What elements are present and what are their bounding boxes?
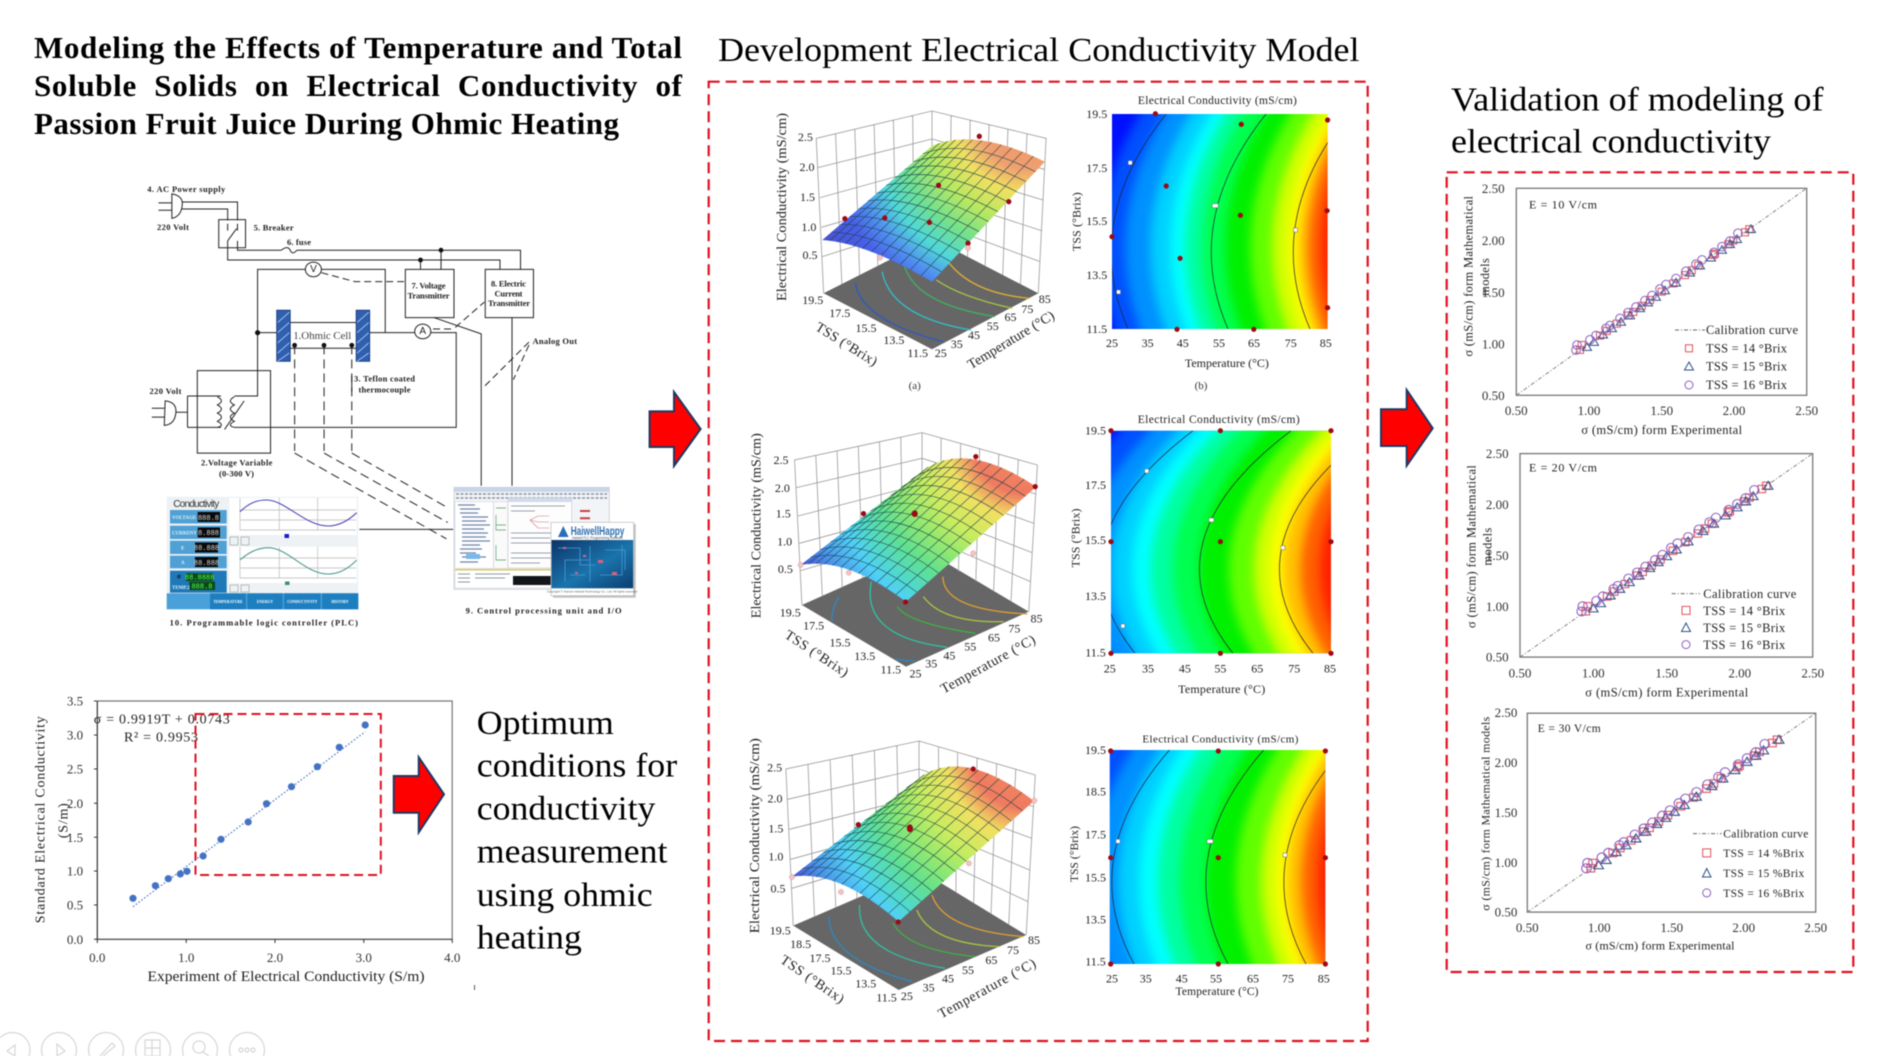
validation chart E = 10 V/cm: σ (mS/cm) form Mathematical [1461,195,1475,357]
3D surface plot (a): Temperature (°C) [965,308,1058,373]
calibration scatter chart: 1.0 [67,864,83,878]
3D surface plot: second row: 19.5 [780,605,801,619]
3D surface plot: third row: 18.5 [790,937,811,951]
text: optimum conditions: conductivity [477,790,655,827]
circuit diagram: ohmic heating system: 220 Volt [150,386,182,396]
PLC interface panel: ENERGY [257,600,273,604]
validation chart E = 20 V/cm: 1.00 [1486,599,1509,614]
validation chart E = 20 V/cm: 2.50 [1801,665,1824,680]
calibration scatter chart: 2.5 [67,762,83,776]
circuit diagram: ohmic heating system: V [310,264,317,275]
validation chart E = 30 V/cm: 1.50 [1495,805,1517,820]
validation chart E = 20 V/cm: 0.50 [1486,650,1509,665]
circuit diagram: ohmic heating system: 4. AC Power supply [147,184,226,194]
contour plot: third row: 17.5 [1085,827,1106,841]
validation chart E = 30 V/cm: 0.50 [1495,905,1517,920]
PLC interface panel: 8.888 [198,530,219,538]
heading: validation: Validation of modeling of [1451,82,1824,119]
contour plot: second row: 85 [1324,661,1336,675]
3D surface plot: second row: Electrical Conductivity (mS/cm) [750,433,765,618]
contour plot: second row: 35 [1142,661,1154,675]
contour plot: second row: 25 [1104,661,1116,675]
contour plot: third row: 55 [1210,971,1222,985]
arrow: to validation panel [1381,390,1433,466]
validation chart E = 30 V/cm: 1.00 [1495,855,1517,870]
PLC interface panel: CONDUCTIVITY [287,600,318,604]
contour plot: second row: 19.5 [1085,424,1106,438]
slide navigation buttons [0,1032,264,1056]
3D surface plot (a): 2.5 [798,130,813,144]
validation chart E = 20 V/cm: TSS = 16 °Brix [1703,638,1786,652]
3D surface plot: second row: 75 [1008,621,1020,635]
3D surface plot (a): Electrical Conductivity (mS/cm) [775,113,790,301]
contour plot (b): Electrical Conductivity (mS/cm) [1138,95,1297,107]
contour plot (b): 25 [1106,336,1118,350]
3D surface plot: third row: 11.5 [876,990,897,1004]
calibration scatter chart: 0.5 [67,898,83,912]
validation chart E = 20 V/cm: 2.00 [1486,497,1509,512]
validation chart E = 10 V/cm: 2.50 [1795,403,1818,418]
3D surface plot: third row: 85 [1028,933,1040,947]
circuit diagram: ohmic heating system: 3. Teflon coated [354,374,415,384]
3D surface plot: third row: Electrical Conductivity (mS/cm) [748,738,763,933]
validation chart E = 10 V/cm: 2.00 [1482,233,1505,248]
validation chart E = 10 V/cm: TSS = 15 °Brix [1706,360,1788,374]
3D surface plot: third row: 45 [942,971,954,985]
calibration scatter chart: 1.0 [178,950,194,965]
title: Passion Fruit Juice During Ohmic Heating [34,106,620,141]
validation chart E = 10 V/cm: 1.00 [1578,403,1600,418]
validation chart E = 20 V/cm: TSS = 15 °Brix [1703,621,1786,635]
3D surface plot (a): 1.0 [801,220,816,234]
text: optimum conditions [477,705,678,956]
contour plot: third row: 11.5 [1085,955,1106,969]
3D surface plot: third row: 0.5 [770,881,786,895]
validation chart E = 20 V/cm: TSS = 14 °Brix [1703,604,1786,618]
PLC interface panel: VOLTAGE [172,516,197,521]
contour plot: second row: 15.5 [1085,533,1106,547]
3D surface plot: third row: 2.5 [767,761,782,775]
contour plot: third row: 13.5 [1085,912,1106,926]
3D surface plot (a): 0.5 [802,248,818,262]
validation chart E = 20 V/cm: 1.50 [1655,665,1678,680]
validation chart E = 30 V/cm: σ (mS/cm) form Mathematical models [1479,716,1493,911]
heading: validation: electrical conductivity [1451,124,1771,160]
3D surface plot (a): 1.5 [800,190,815,204]
circuit diagram: ohmic heating system: thermocouple [358,385,411,395]
validation chart E = 10 V/cm: 0.50 [1505,403,1528,418]
3D surface plot (a): (a) [909,380,921,392]
3D surface plot (a): 25 [935,346,947,360]
PLC interface panel: 88.888 [194,560,219,568]
validation chart E = 10 V/cm: E = 10 V/cm [1529,197,1598,211]
contour plot: third row: TSS (°Brix) [1069,826,1081,882]
contour plot (b): 17.5 [1086,161,1107,175]
3D surface plot (a): 2.0 [800,160,814,174]
3D surface plot: second row [750,433,1042,697]
contour plot: second row: Temperature (°C) [1178,682,1265,696]
3D surface plot (a): 11.5 [907,346,928,360]
circuit diagram: ohmic heating system: 5. Breaker [254,223,294,233]
text: optimum conditions: measurement [477,834,668,871]
contour plot: third row: 65 [1247,971,1259,985]
circuit diagram: ohmic heating system: Current [494,288,523,298]
calibration scatter chart: Experiment of Electrical Conductivity (S/m) [148,969,424,985]
control processing software screenshot: Haiwell PLC Programming Software [572,536,623,540]
control processing software screenshot: Copyright © Xiamen Haiwell Technology Co., Ltd. All rights reserved [547,590,637,594]
contour plot: second row: 75 [1288,661,1300,675]
validation chart E = 10 V/cm: TSS = 16 °Brix [1706,378,1788,392]
circuit diagram: ohmic heating system: 220 Volt [157,222,189,232]
3D surface plot: second row: 25 [910,666,922,680]
contour plot (b): 45 [1177,336,1189,350]
3D surface plot: second row: 0.5 [778,562,793,576]
3D surface plot: second row: 85 [1030,611,1042,625]
panel: validation [1447,172,1853,972]
calibration scatter chart: 3.0 [67,728,83,742]
3D surface plot: second row: 1.5 [776,506,791,520]
contour plot: third row: 18.5 [1085,785,1106,799]
3D surface plot: third row: 1.0 [768,850,783,864]
calibration scatter chart: 4.0 [444,950,460,965]
validation chart E = 20 V/cm: E = 20 V/cm [1529,460,1598,474]
3D surface plot: second row: 13.5 [854,649,875,663]
validation chart E = 30 V/cm: TSS = 16 %Brix [1723,888,1805,900]
validation chart E = 20 V/cm: models [1480,527,1494,566]
text: optimum conditions: Optimum [477,705,614,742]
3D surface plot: second row: 2.0 [775,481,790,495]
calibration scatter chart: R² = 0.9953 [124,731,198,746]
calibration scatter chart: Standard Electrical Conductivity [34,716,48,923]
3D surface plot: third row: 75 [1007,943,1019,957]
circuit diagram: ohmic heating system: (0-300 V) [219,468,254,478]
PLC interface panel: E [181,546,185,552]
3D surface plot: third row: 35 [923,981,935,995]
contour plot (b): 15.5 [1086,214,1107,228]
calibration scatter chart: 1.5 [67,830,83,845]
contour plot (b): 55 [1213,336,1225,350]
contour plot (b): 65 [1248,336,1260,350]
calibration scatter chart [34,694,460,985]
PLC interface panel: HISTORY [331,600,349,604]
calibration scatter chart: 2.0 [67,796,83,811]
contour plot: second row: 55 [1214,661,1226,675]
validation chart E = 30 V/cm: 1.00 [1588,920,1611,935]
validation chart E = 10 V/cm: 2.00 [1723,403,1745,418]
3D surface plot: third row: 25 [901,989,913,1003]
contour plot (b): 35 [1142,336,1154,350]
contour plot: third row: 45 [1176,971,1188,985]
validation chart E = 10 V/cm: 2.50 [1482,181,1505,196]
PLC interface panel: TEMPERATURE [213,600,243,604]
contour plot: second row: 65 [1251,661,1263,675]
PLC interface panel [167,497,358,628]
validation chart E = 20 V/cm: σ (mS/cm) form Mathematical [1465,465,1479,628]
calibration scatter chart: 3.5 [67,694,83,708]
circuit diagram: ohmic heating system: Transmitter [408,290,450,300]
3D surface plot: second row: Temperature (°C) [938,633,1039,697]
validation chart E = 10 V/cm [1461,181,1818,437]
calibration scatter chart: σ = 0.9919T + 0.0743 [94,712,230,727]
3D surface plot: third row: 15.5 [830,964,852,978]
3D surface plot: second row: 55 [964,640,976,654]
3D surface plot (a) [775,111,1058,392]
title: Soluble Solids on Electrical Conductivity of [34,68,683,103]
contour plot: third row: Temperature (°C) [1176,986,1259,998]
3D surface plot: third row: 1.5 [768,821,783,835]
circuit diagram: ohmic heating system: A [419,326,426,337]
contour plot: second row: Electrical Conductivity (mS/cm) [1138,414,1300,426]
validation chart E = 30 V/cm: σ (mS/cm) form Experimental [1586,939,1735,953]
validation chart E = 30 V/cm [1479,705,1827,953]
panel: development model [706,80,1370,1043]
PLC interface panel: 88.888 [194,545,219,553]
validation chart E = 20 V/cm: 1.50 [1486,548,1509,563]
validation chart E = 30 V/cm: E = 30 V/cm [1538,723,1601,735]
3D surface plot (a): 35 [951,337,963,351]
contour plot (b): 13.5 [1086,268,1107,282]
validation chart E = 20 V/cm: 2.00 [1728,665,1751,680]
validation chart E = 30 V/cm: 0.50 [1516,920,1539,935]
calibration scatter chart: 0.0 [67,932,83,947]
contour plot: third row: Electrical Conductivity (mS/cm) [1142,733,1299,745]
contour plot: third row: 35 [1140,971,1152,985]
contour plot: third row: 19.5 [1085,743,1106,757]
3D surface plot: second row: 15.5 [830,636,850,650]
contour plot: second row: 17.5 [1085,478,1106,492]
contour plot: second row: 11.5 [1085,645,1106,659]
contour plot: second row: 13.5 [1085,589,1106,603]
validation chart E = 30 V/cm: TSS = 15 %Brix [1723,868,1805,880]
3D surface plot: second row: 11.5 [881,662,901,676]
validation chart E = 30 V/cm: 2.00 [1495,755,1517,770]
3D surface plot (a): 75 [1021,302,1033,316]
3D surface plot: third row: 2.0 [768,791,782,805]
contour plot (b) [1072,95,1332,392]
3D surface plot (a): 17.5 [829,306,850,320]
PLC interface panel: 888.8 [198,515,219,523]
3D surface plot: third row [748,738,1040,1022]
circuit diagram: ohmic heating system: 6. fuse [287,237,311,247]
validation chart E = 20 V/cm: 1.00 [1582,665,1605,680]
validation chart E = 30 V/cm: Calibration curve [1723,828,1808,840]
3D surface plot: second row: 17.5 [803,619,824,633]
3D surface plot: second row: 2.5 [774,453,788,467]
circuit diagram: ohmic heating system [147,184,577,539]
PLC interface panel: 88.8888 [185,574,214,582]
contour plot (b): 75 [1285,336,1297,350]
validation chart E = 10 V/cm: 0.50 [1482,388,1505,403]
3D surface plot: third row: Temperature (°C) [936,956,1039,1022]
3D surface plot: third row: 17.5 [810,951,830,965]
3D surface plot (a): 15.5 [856,321,876,335]
3D surface plot (a): 85 [1039,292,1051,306]
contour plot: third row: 85 [1318,971,1330,985]
PLC interface panel: CURRENT [172,532,197,536]
validation chart E = 10 V/cm: TSS = 14 °Brix [1706,342,1788,356]
heading: validation [1451,82,1824,160]
contour plot (b): 11.5 [1087,322,1107,336]
circuit diagram: ohmic heating system: Transmitter [488,298,530,308]
PLC interface panel: σ [177,572,181,580]
title [34,30,683,141]
validation chart E = 10 V/cm: σ (mS/cm) form Experimental [1581,423,1743,437]
control processing software screenshot [454,487,637,616]
validation chart E = 10 V/cm: 1.50 [1650,403,1673,418]
validation chart E = 30 V/cm: TSS = 14 %Brix [1723,848,1805,860]
PLC interface panel: 10. Programmable logic controller (PLC) [170,618,358,628]
validation chart E = 20 V/cm: 2.50 [1486,446,1509,461]
contour plot: second row [1070,414,1336,696]
calibration scatter chart: 3.0 [356,950,372,965]
calibration scatter chart: 2.0 [267,950,283,965]
validation chart E = 20 V/cm: Calibration curve [1703,587,1797,601]
control processing software screenshot: HaiwellHappy [571,526,625,538]
control processing software screenshot: 9. Control processing unit and I/O [466,606,622,616]
validation chart E = 30 V/cm: 2.50 [1804,920,1827,935]
3D surface plot: second row: TSS (°Brix) [782,628,851,681]
contour plot (b): 85 [1320,336,1332,350]
validation chart E = 20 V/cm: σ (mS/cm) form Experimental [1585,686,1749,700]
text: optimum conditions: conditions for [477,748,678,785]
contour plot: third row: 75 [1282,971,1294,985]
PLC interface panel: 888.8 [191,584,213,592]
arrow: to development panel [650,392,701,466]
3D surface plot (a): 19.5 [802,293,823,307]
3D surface plot: second row: 65 [988,631,1000,645]
PLC interface panel: TEMP.2 [172,586,190,591]
text: optimum conditions: using ohmic [477,877,653,914]
3D surface plot: third row: 65 [985,953,997,967]
contour plot (b): (b) [1195,380,1208,392]
validation chart E = 10 V/cm: 1.00 [1482,336,1505,352]
contour plot (b): 19.5 [1086,107,1107,121]
3D surface plot: third row: 19.5 [770,924,791,938]
circuit diagram: ohmic heating system: 8. Electric [491,278,526,288]
circuit diagram: ohmic heating system: 7. Voltage [412,281,446,291]
calibration scatter chart: 0.0 [89,950,105,965]
PLC interface panel: Conductivity [173,499,219,510]
3D surface plot (a): TSS (°Brix) [812,320,880,370]
PLC interface panel: A [181,561,185,566]
validation chart E = 20 V/cm [1465,446,1824,700]
validation chart E = 30 V/cm: 1.50 [1660,920,1683,935]
validation chart E = 10 V/cm: 1.50 [1482,285,1505,300]
circuit diagram: ohmic heating system: Analog Out [532,336,577,346]
contour plot: second row: TSS (°Brix) [1069,508,1083,568]
validation chart E = 10 V/cm: Calibration curve [1706,323,1798,337]
3D surface plot: second row: 45 [943,649,955,663]
contour plot: second row: 45 [1179,661,1191,675]
arrow: to optimum conditions [394,757,444,832]
validation chart E = 20 V/cm: 0.50 [1509,665,1531,680]
circuit diagram: ohmic heating system: 2.Voltage Variable [201,457,273,467]
3D surface plot (a): 13.5 [883,333,904,347]
validation chart E = 30 V/cm: 2.00 [1732,920,1755,935]
contour plot (b): Temperature (°C) [1185,356,1269,370]
3D surface plot (a): 45 [968,328,980,342]
heading: development model: Development Electrical Conductivity Model [718,32,1360,69]
3D surface plot: second row: 1.0 [777,535,792,549]
3D surface plot: third row: 55 [962,963,974,977]
text: optimum conditions: heating [477,919,582,956]
contour plot: third row: 25 [1106,971,1118,985]
3D surface plot: third row: 13.5 [855,976,876,990]
validation chart E = 30 V/cm: 2.50 [1495,705,1517,720]
3D surface plot (a): 65 [1004,310,1016,324]
3D surface plot (a): 55 [987,319,999,333]
validation chart E = 10 V/cm: models [1478,258,1492,296]
3D surface plot: second row: 35 [925,656,937,670]
contour plot: third row [1069,734,1330,998]
contour plot: third row: 15.5 [1085,870,1106,884]
3D surface plot: third row: TSS (°Brix) [777,953,847,1007]
circuit diagram: ohmic heating system: 1.Ohmic Cell [293,330,351,342]
calibration scatter chart: (S/m) [56,803,71,838]
title: Modeling the Effects of Temperature and Total [34,30,682,65]
contour plot (b): TSS (°Brix) [1069,192,1083,251]
